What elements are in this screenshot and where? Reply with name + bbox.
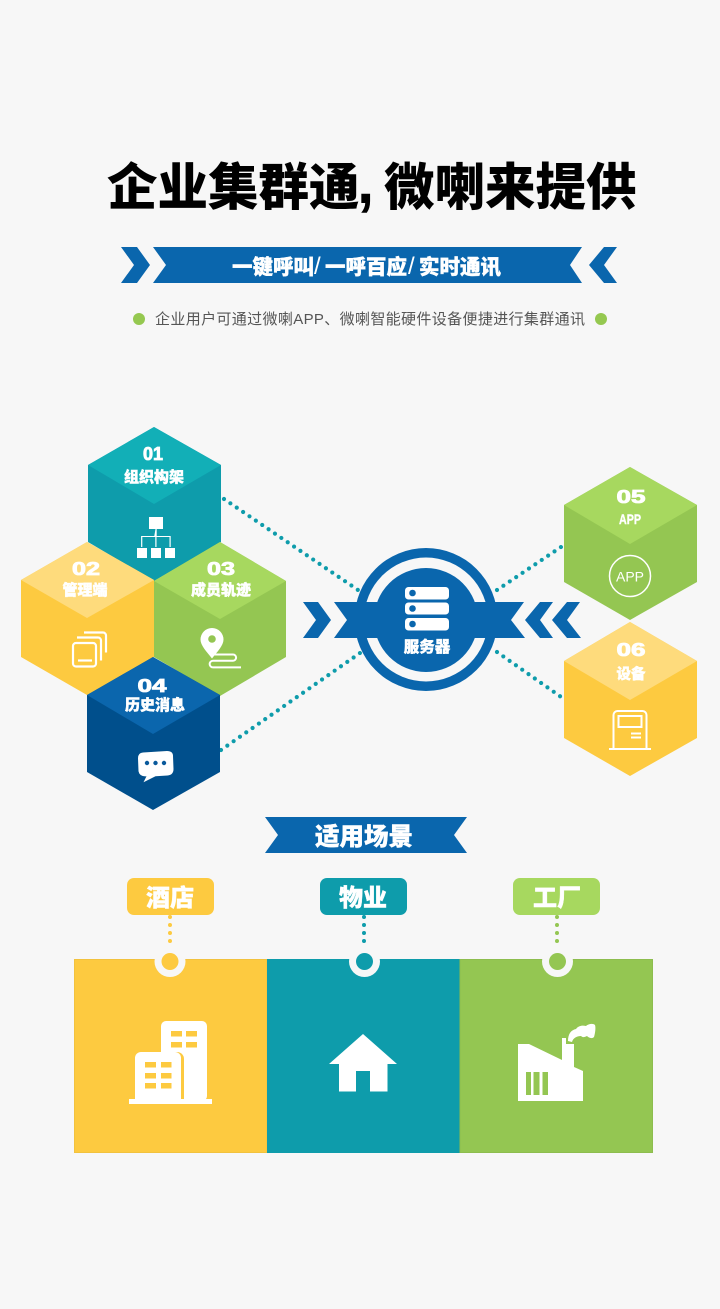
panel: property	[267, 878, 460, 1153]
icon: chat bubble	[138, 751, 174, 782]
icon: app circle	[610, 556, 650, 596]
hexagon 01: organization	[88, 427, 221, 581]
section banner: scenarios	[265, 817, 467, 853]
hexagon 02: admin: 管理端	[62, 581, 108, 599]
subtitle ribbon: 一键呼叫	[232, 256, 314, 279]
hexagon 01: organization: 组织构架	[124, 468, 184, 486]
subtitle ribbon	[121, 247, 617, 283]
title: 企业集群通	[107, 159, 360, 216]
hexagon 04: message history: 04	[138, 676, 166, 696]
title: ,	[357, 148, 374, 217]
hexagon 06: device	[564, 622, 697, 776]
icon: org chart	[137, 517, 175, 558]
hexagon 05: app	[564, 467, 697, 620]
subtitle ribbon: /	[408, 253, 415, 280]
icon: house	[329, 1034, 397, 1092]
server hub: 服务器	[404, 637, 451, 656]
tag: hotel: 酒店	[146, 885, 194, 912]
icon: device terminal	[609, 711, 651, 749]
icon: app circle: APP	[616, 568, 644, 584]
hexagon 06: device: 设备	[616, 665, 646, 683]
hexagon 04: message history: 历史消息	[125, 696, 185, 714]
hexagon 01: organization: 01	[143, 444, 163, 464]
panel: hotel	[74, 878, 267, 1152]
icon: factory	[518, 1024, 595, 1101]
hexagon 06: device: 06	[616, 640, 646, 660]
tag: property	[320, 878, 407, 915]
hexagon 03: member track: 成员轨迹	[191, 581, 251, 599]
description line: 企业用户可通过微喇APP、微喇智能硬件设备便捷进行集群通讯	[155, 310, 585, 328]
hexagon 05: app: 05	[616, 487, 646, 507]
hexagon 02: admin	[21, 542, 154, 695]
dotted connectors	[221, 499, 564, 750]
subtitle ribbon: /	[314, 253, 321, 280]
title	[107, 148, 636, 217]
section banner: scenarios: 适用场景	[315, 823, 413, 851]
panel: factory	[460, 878, 652, 1152]
hexagon 03: member track: 03	[207, 559, 235, 579]
icon: location pin and track	[200, 628, 241, 667]
tag: factory: 工厂	[533, 885, 581, 912]
tag: factory	[513, 878, 600, 915]
tag: hotel	[127, 878, 214, 915]
hexagon 05: app: APP	[619, 511, 641, 527]
hexagon 02: admin: 02	[72, 559, 100, 579]
tag: property: 物业	[339, 885, 387, 912]
hexagon 03: member track	[154, 542, 286, 696]
hexagon 04: message history	[87, 657, 220, 810]
icon: buildings	[129, 1021, 212, 1104]
subtitle ribbon: 一呼百应	[325, 255, 407, 279]
server hub	[303, 548, 581, 691]
subtitle ribbon: 实时通讯	[419, 255, 501, 279]
title: 微喇来提供	[384, 159, 636, 216]
icon: server rack	[405, 587, 449, 630]
icon: stacked pages	[73, 632, 106, 666]
